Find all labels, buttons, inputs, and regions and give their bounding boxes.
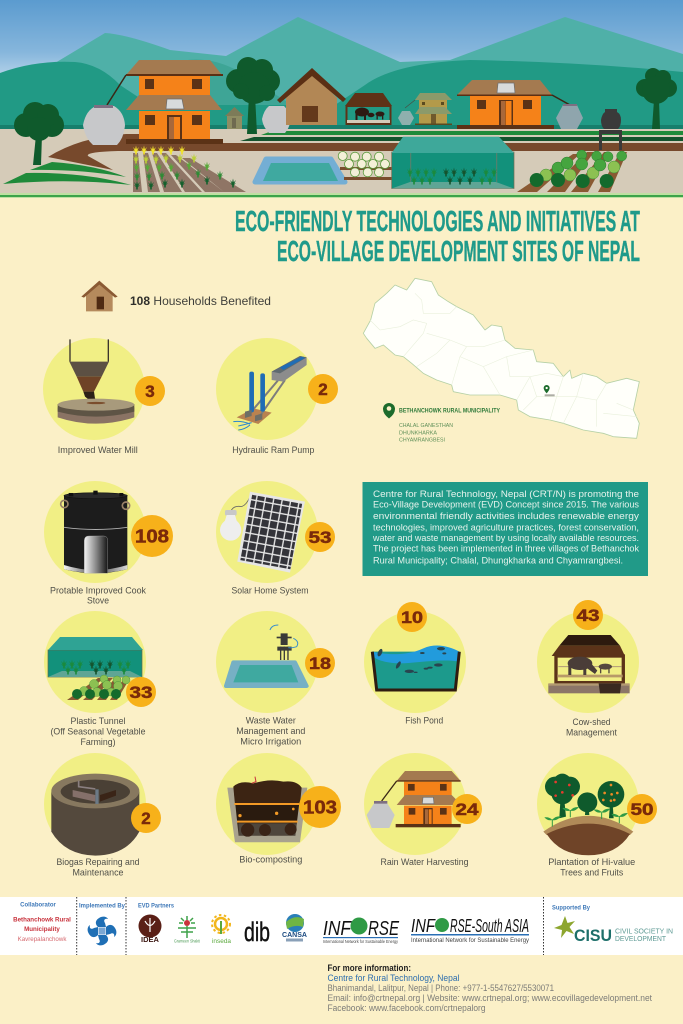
label: Cow-shed: [572, 717, 610, 727]
contact information: [328, 963, 653, 1013]
title: [235, 206, 640, 268]
CISU tagline: DEVELOPMENT: [615, 934, 666, 943]
map legend: [383, 403, 500, 444]
count badge: 2: [141, 809, 151, 828]
illustration: eco-village landscape: [0, 0, 683, 198]
label: Protable Improved Cook: [50, 585, 146, 595]
label: Micro Irrigation: [240, 736, 301, 746]
logo: INFORSE-South Asia: International Network for Sustainable Energy: [411, 938, 529, 944]
label: [56, 857, 140, 878]
label: [50, 716, 146, 747]
logo: CANSA: CANSA: [282, 930, 308, 939]
implemented by: [79, 904, 126, 945]
label: [566, 717, 617, 737]
label: Farming): [80, 737, 116, 747]
panel: description: Eco-Village Development (EVD) Concept since 2015. The various: [373, 500, 639, 510]
count badge: 3: [145, 382, 155, 401]
icon: cook stove: [61, 491, 130, 573]
implemented by: Implemented By: [79, 904, 126, 910]
tree: [14, 102, 64, 165]
pot: [262, 106, 291, 133]
logo: Grameen Shakti: Grameen Shakti: [174, 938, 200, 944]
label: [548, 857, 635, 878]
panel: description: technologies, improved agriculture practices, forest conservation,: [373, 522, 639, 532]
logo: INFORSE: International Network for Sustainable Energy: [323, 939, 399, 944]
count badge: 18: [309, 654, 331, 673]
collaborator: Kavrepalanchowk: [18, 936, 67, 943]
label: Fish Pond: [405, 715, 443, 725]
logo: CISU wordmark: CISU: [574, 926, 612, 945]
small pot: [398, 111, 414, 125]
panel: Bio-composting: [216, 753, 341, 864]
households benefited: [81, 281, 271, 311]
village names: CHALAL GANESTHAN: [399, 423, 453, 429]
panel: Solar Home System: [216, 481, 335, 595]
bottom stripe: [0, 193, 683, 198]
logo: INFORSE: INF: [323, 918, 353, 940]
village names: DHUNKHARKA: [399, 430, 437, 436]
logo: INFORSE: [323, 918, 399, 944]
contact information: Facebook: www.facebook.com/crtnepalorg: [328, 1003, 486, 1013]
icon: pond with sprinkler: [226, 625, 307, 686]
panel: Plantation of Hi-value Trees and Fruits: [537, 753, 657, 878]
logo: INFORSE-South Asia: INF: [411, 916, 436, 936]
supported by: Supported By: [552, 906, 591, 912]
label: Maintenance: [72, 868, 124, 878]
supported by: [552, 906, 673, 945]
contact information: Email: info@crtnepal.org | Website: www.crtnepal.org; www.ecovillagedevelopment.net: [328, 993, 653, 1003]
panel: description: The project has been implemented in three villages of Bethanchok: [373, 544, 639, 554]
icon: biogas digester: [51, 774, 139, 856]
ground: [0, 129, 683, 193]
label: Plantation of Hi-value: [548, 857, 635, 867]
CISU tagline: [615, 926, 673, 943]
icon: cow shed: [548, 635, 630, 693]
village names: CHYAMRANGBESI: [399, 438, 445, 444]
label: Waste Water: [246, 716, 296, 726]
contact information: For more information:: [328, 963, 411, 973]
logo: IDEA: IDEA: [141, 935, 160, 944]
tree: [226, 57, 280, 134]
label: Hydraulic Ram Pump: [232, 445, 314, 455]
label: Rain Water Harvesting: [380, 857, 468, 867]
partner logo band: [0, 897, 683, 955]
logo: dib: dib: [244, 917, 270, 947]
count badge: 103: [303, 796, 337, 818]
water tank: [599, 109, 622, 150]
panel: Rain Water Harvesting: [364, 753, 482, 867]
count badge: 50: [630, 800, 654, 819]
contact information: Centre for Rural Technology, Nepal: [328, 973, 460, 983]
icon: water mill: [58, 339, 134, 424]
collaborator: Bethanchowk Rural: [13, 916, 71, 924]
map of Nepal: [363, 278, 639, 438]
logo: IDEA: [138, 914, 162, 944]
count badge: 2: [318, 380, 328, 399]
count badge: 53: [308, 528, 332, 547]
logo: INFORSE-South Asia: [411, 916, 529, 944]
logo: CANSA: [282, 914, 308, 942]
panel: description: water and waste management by using locally available resources.: [372, 533, 639, 543]
count badge: 33: [130, 683, 152, 702]
CISU tagline: CIVIL SOCIETY IN: [615, 926, 673, 936]
label: [236, 716, 305, 746]
households text: 108 Households Benefited: [130, 294, 271, 308]
icon: ram pump: [233, 356, 307, 430]
logo: Grameen Shakti: [174, 916, 200, 944]
village names: [399, 423, 453, 444]
icon: CRT logo: [88, 917, 116, 945]
brown path: [48, 134, 683, 170]
panel: Improved Water Mill: [43, 338, 165, 455]
maize field: [133, 146, 246, 192]
count badge: 10: [401, 608, 423, 627]
panel: Hydraulic Ram Pump: [216, 338, 338, 455]
label: Bio-composting: [239, 854, 302, 864]
contact information: Bhanimandal, Lalitpur, Nepal | Phone: +977-1-5547627/5530071: [328, 983, 554, 993]
big house with rain pot: [83, 60, 223, 145]
panel: Fish Pond: [364, 602, 466, 725]
panel: description: environmental friendly activities includes renewable energy: [373, 511, 640, 521]
label: (Off Seasonal Vegetable: [50, 727, 146, 737]
icon: plastic tunnel: [48, 637, 143, 700]
small two-storey house: [405, 93, 452, 125]
count badge: 24: [456, 800, 479, 819]
plastic tunnel greenhouse: [392, 137, 514, 188]
cow shed: [345, 93, 392, 124]
cauliflower field: [338, 152, 392, 180]
logo: INFORSE: RSE: [368, 918, 399, 940]
label: Improved Water Mill: [58, 445, 138, 455]
icon: fish pond: [372, 646, 459, 690]
panel: Portable Improved Cook Stove: [44, 481, 173, 606]
icon: compost bin: [227, 777, 307, 842]
icon: legend pin: [383, 403, 395, 418]
label: Trees and Fruits: [560, 868, 624, 878]
icon: house with rain pot: [367, 771, 462, 828]
logo: INFORSE-South Asia: RSE-South ASIA: [450, 916, 529, 936]
panel: Plastic Tunnel: [44, 611, 156, 747]
logo: inseda: [212, 915, 231, 945]
count badge: 108: [135, 526, 169, 546]
EVD partners: EVD Partners: [138, 904, 175, 910]
icon: house: [81, 281, 118, 311]
label: Stove: [87, 596, 109, 606]
cabbage field: [517, 150, 627, 192]
label: Solar Home System: [232, 585, 309, 595]
count badge: 43: [576, 606, 600, 625]
fish pond: [255, 159, 345, 182]
icon: fruit trees on a hill: [543, 774, 633, 855]
tree: [636, 68, 677, 129]
collaborator: Municipality: [24, 926, 60, 933]
panel: description: Centre for Rural Technology, Nepal (CRT/N) is promoting the: [373, 489, 639, 499]
label: Management and: [236, 726, 305, 736]
collaborator: Collaborator: [20, 902, 56, 908]
right house with rain pot: [457, 80, 583, 129]
collaborator: [13, 902, 71, 943]
municipality name: BETHANCHOWK RURAL MUNICIPALITY: [399, 408, 500, 414]
panel: Waste Water Management and Micro Irrigation: [216, 611, 335, 746]
icon: Bethanchowk location pin: [544, 385, 555, 396]
terraced fields: [3, 131, 683, 185]
label: Management: [566, 727, 617, 737]
small hut: [225, 107, 244, 129]
icon: solar panel and bulb: [220, 492, 305, 573]
brown house: [277, 68, 346, 125]
icon: CISU star: [554, 916, 575, 938]
label: [50, 585, 146, 606]
EVD partners: [138, 904, 529, 947]
label: Plastic Tunnel: [70, 716, 126, 726]
panel: description: [362, 482, 648, 576]
panel: description: Rural Municipality; Chalal, Dhungkharka and Chyamrangbesi.: [373, 555, 623, 565]
logo: inseda: inseda: [212, 938, 231, 945]
mountains: [0, 17, 683, 130]
panel: Cow-shed Management: [537, 600, 639, 737]
panel: Biogas Repairing and Maintenance: [44, 753, 161, 878]
label: Biogas Repairing and: [56, 857, 140, 867]
